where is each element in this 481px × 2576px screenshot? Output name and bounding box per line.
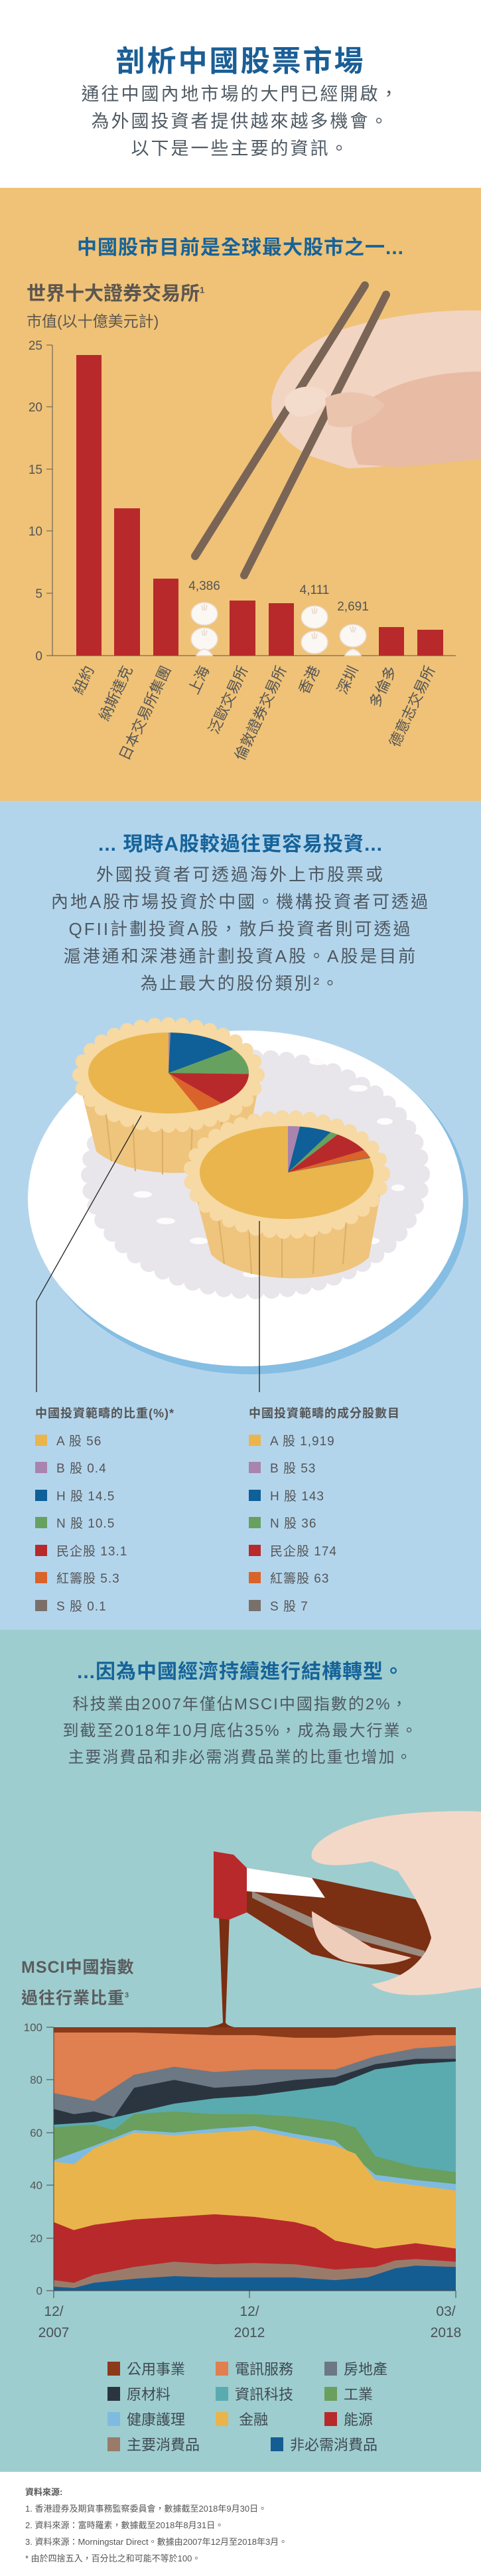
- bar chart: 2,691: [337, 600, 369, 614]
- legend: weight: 中國投資範疇的比重(%)*: [35, 1407, 174, 1420]
- panel: structural transformation: [0, 1630, 481, 2472]
- stacked area chart: 03/: [436, 2304, 456, 2319]
- bar chart: 納斯達克: [96, 664, 136, 723]
- text block: 滬港通和深港通計劃投資A股。A股是目前: [64, 946, 417, 966]
- bar chart: 4,111: [300, 583, 329, 597]
- legend: weight: N 股 10.5: [56, 1517, 115, 1531]
- intro text: 為外國投資者提供越來越多機會。: [92, 111, 390, 131]
- section: intro: [0, 0, 481, 188]
- chart title: 過往行業比重3: [21, 1989, 129, 2007]
- text block: [62, 1695, 419, 1766]
- stacked area chart: 20: [30, 2232, 42, 2245]
- text block: 內地A股市場投資於中國。機構投資者可透過: [51, 892, 430, 912]
- legend: sectors: 電訊服務: [235, 2361, 293, 2378]
- text block: 外國投資者可透過海外上市股票或: [96, 865, 385, 885]
- bar chart: 香港: [295, 664, 323, 697]
- footnotes: 3. 資料來源：Morningstar Direct。數據由2007年12月至2018年3月。: [25, 2537, 287, 2547]
- legend: sectors: 非必需消費品: [290, 2437, 378, 2453]
- stacked area chart: [24, 2021, 461, 2340]
- intro text: 通往中國內地市場的大門已經開啟，: [81, 84, 399, 104]
- stacked area chart: 60: [30, 2127, 42, 2139]
- bar chart: 4,386: [188, 579, 220, 593]
- legend: constituents: A 股 1,919: [270, 1435, 335, 1449]
- legend: sectors: 金融: [239, 2411, 268, 2428]
- heading: ...因為中國經濟持續進行結構轉型。: [77, 1661, 404, 1683]
- bar chart: 紐約: [70, 664, 98, 697]
- chart title: 世界十大證券交易所1: [27, 283, 204, 305]
- illustration: hand with chopsticks: [195, 285, 481, 575]
- heading: ... 現時A股較過往更容易投資...: [98, 833, 383, 855]
- bar chart: [29, 339, 456, 763]
- legend: constituents: [249, 1407, 400, 1614]
- legend: sectors: 能源: [344, 2411, 373, 2428]
- stacked area chart: 2012: [234, 2325, 265, 2340]
- footnotes: 資料來源:: [25, 2487, 62, 2497]
- text block: 科技業由2007年僅佔MSCI中國指數的2%，: [72, 1695, 409, 1713]
- tart 1: [78, 1025, 260, 1175]
- footnotes: [25, 2487, 287, 2563]
- legend: constituents: H 股 143: [270, 1490, 324, 1504]
- bar chart: 上海: [185, 664, 213, 697]
- legend: sectors: 資訊科技: [235, 2386, 293, 2403]
- stacked area chart: 12/: [44, 2304, 64, 2319]
- footnotes: * 由於四捨五入，百分比之和可能不等於100。: [25, 2553, 200, 2563]
- intro text: 以下是一些主要的資訊。: [131, 139, 350, 159]
- legend: weight: S 股 0.1: [56, 1600, 107, 1614]
- bar chart: 25: [29, 339, 42, 353]
- text block: QFII計劃投資A股，散戶投資者則可透過: [69, 919, 412, 939]
- panel: world largest exchanges: [0, 188, 481, 801]
- footnotes: 1. 香港證券及期貨事務監察委員會，數據截至2018年9月30日。: [25, 2504, 267, 2514]
- bar chart: 深圳: [334, 664, 362, 697]
- legend: weight: B 股 0.4: [56, 1462, 107, 1476]
- legend: weight: 紅籌股 5.3: [56, 1572, 120, 1586]
- bar chart: 20: [29, 401, 42, 415]
- footnotes: 2. 資料來源：富時羅素，數據截至2018年8月31日。: [25, 2520, 224, 2530]
- bar chart: 0: [35, 650, 42, 664]
- legend: weight: H 股 14.5: [56, 1490, 115, 1504]
- text block: 到截至2018年10月底佔35%，成為最大行業。: [62, 1722, 419, 1740]
- callout lines: [36, 1115, 259, 1392]
- bar chart: 德意志交易所: [386, 664, 439, 750]
- chart subtitle: 市值(以十億美元計): [27, 313, 159, 330]
- text block: 為止最大的股份類別²。: [141, 973, 340, 993]
- stacked area chart: 2018: [431, 2325, 461, 2340]
- legend: sectors: 健康護理: [127, 2411, 185, 2428]
- icon: dumplings: [191, 603, 366, 656]
- chart title: MSCI中國指數: [21, 1958, 135, 1977]
- illustration: soy sauce bottle and hand: [204, 1811, 481, 2028]
- legend: sectors: 房地產: [344, 2361, 387, 2378]
- legend: weight: [35, 1407, 174, 1614]
- legend: constituents: 中國投資範疇的成分股數目: [249, 1407, 400, 1420]
- stacked area chart: 100: [24, 2021, 42, 2034]
- legend: sectors: 工業: [344, 2386, 373, 2403]
- heading: 中國股市目前是全球最大股市之一...: [77, 237, 404, 259]
- text block: [51, 865, 430, 993]
- intro text: [81, 84, 399, 159]
- legend: sectors: 公用事業: [127, 2361, 185, 2378]
- panel: A shares: [0, 801, 481, 1630]
- legend: sectors: 原材料: [127, 2386, 171, 2403]
- bar chart: 15: [29, 463, 42, 477]
- bar chart: 多倫多: [366, 664, 400, 710]
- chart title: [21, 1958, 135, 2007]
- legend: constituents: S 股 7: [270, 1600, 309, 1614]
- bar chart: 泛歐交易所: [205, 664, 251, 737]
- stacked area chart: 40: [30, 2179, 42, 2192]
- legend: sectors: [107, 2361, 387, 2453]
- legend: weight: 民企股 13.1: [56, 1545, 127, 1559]
- legend: constituents: 民企股 174: [270, 1545, 337, 1559]
- title: 剖析中國股票市場: [115, 45, 365, 78]
- stacked area chart: 2007: [38, 2325, 69, 2340]
- tart 2: [190, 1117, 383, 1278]
- stacked area chart: 80: [30, 2074, 42, 2086]
- stacked area chart: 12/: [240, 2304, 259, 2319]
- legend: sectors: 主要消費品: [127, 2437, 200, 2453]
- illustration: plate with egg tarts: [28, 1025, 468, 1374]
- text block: 主要消費品和非必需消費品業的比重也增加。: [68, 1749, 413, 1766]
- stacked area chart: 0: [36, 2285, 42, 2297]
- bar chart: 10: [29, 525, 42, 539]
- bar chart: 5: [35, 587, 42, 601]
- bar chart: 日本交易所集團: [116, 664, 174, 763]
- legend: weight: A 股 56: [56, 1435, 102, 1449]
- bar chart: 倫敦證券交易所: [232, 664, 290, 763]
- legend: constituents: B 股 53: [270, 1462, 316, 1476]
- legend: constituents: 紅籌股 63: [270, 1572, 329, 1586]
- legend: constituents: N 股 36: [270, 1517, 316, 1531]
